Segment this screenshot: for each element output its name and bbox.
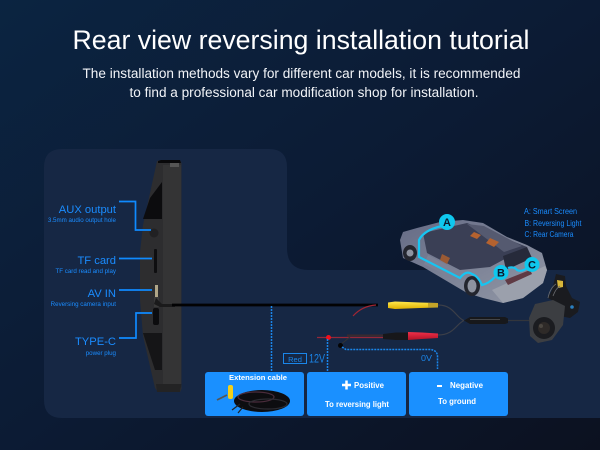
legend: A: Smart Screen — [524, 207, 577, 216]
card: extension cable: Extension cable — [229, 373, 287, 382]
callout: TYPE-C: TYPE-C — [75, 336, 116, 348]
callout: AV IN: AV IN — [88, 288, 116, 300]
legend — [524, 207, 582, 239]
car cutaway illustration — [400, 220, 547, 303]
label: 12V: 12V — [309, 352, 325, 366]
marker: red 12V dot — [326, 335, 331, 340]
subtitle text block: to find a professional car modification shop for installation. — [130, 85, 478, 100]
callout: AUX output — [48, 202, 151, 230]
card: positive: To reversing light — [325, 400, 389, 409]
callout: TF card: TF card — [77, 255, 116, 267]
icon: coiled cable — [217, 385, 290, 413]
marker: B — [494, 265, 508, 280]
connector: yellow RCA — [388, 302, 438, 309]
AV plug and cable head — [154, 285, 175, 307]
callout: TF card: TF card read and play — [55, 268, 117, 275]
marker: A — [439, 214, 455, 230]
dashed lead: 0V — [342, 347, 438, 369]
connector: red and black power — [317, 332, 438, 345]
legend: B: Reversing Light — [524, 219, 582, 228]
icon: plus — [342, 380, 351, 390]
marker: A: A — [443, 217, 451, 229]
subtitle text block: The installation methods vary for different car models, it is recommended — [82, 66, 520, 81]
cable: extension to yellow connector — [172, 304, 378, 306]
callout: TYPE-C — [75, 313, 152, 357]
card: extension cable — [205, 372, 304, 416]
card: negative: To ground — [438, 397, 476, 406]
thin red lead — [353, 305, 376, 316]
callout: TYPE-C: power plug — [86, 350, 117, 357]
panel: installation diagram background — [44, 149, 600, 418]
label: Red tag — [284, 354, 306, 364]
card: positive: Positive — [354, 381, 385, 390]
Y-wires to camera connector — [438, 305, 464, 335]
marker: C: C — [528, 260, 536, 272]
callout: AV IN — [51, 288, 152, 308]
marker: black ground dot — [338, 343, 343, 348]
card: negative: Negative — [450, 381, 484, 390]
connector: black camera plug — [464, 317, 532, 324]
callout: AUX output: AUX output — [59, 204, 117, 216]
card: positive — [307, 372, 406, 416]
label: 0V: 0V — [421, 353, 432, 363]
marker: B: B — [497, 268, 505, 280]
dashed lead: extension cable — [270, 306, 272, 372]
dashed lead: 12V — [326, 339, 328, 372]
route line: A to B to C — [419, 226, 530, 285]
title: Rear view reversing installation tutorial — [72, 25, 530, 55]
callout: AV IN: Reversing camera input — [51, 301, 116, 308]
icon: minus — [437, 385, 442, 387]
device: smart screen side view — [140, 160, 182, 392]
label: Red tag: Red — [288, 355, 302, 364]
callout: AUX output: 3.5mm audio output hole — [48, 217, 117, 224]
subtitle text block — [82, 66, 520, 100]
marker: C — [524, 257, 540, 272]
legend: C: Rear Camera — [524, 230, 574, 239]
card: negative — [409, 372, 508, 416]
rear camera illustration — [529, 274, 580, 343]
callout: TF card — [55, 255, 152, 275]
